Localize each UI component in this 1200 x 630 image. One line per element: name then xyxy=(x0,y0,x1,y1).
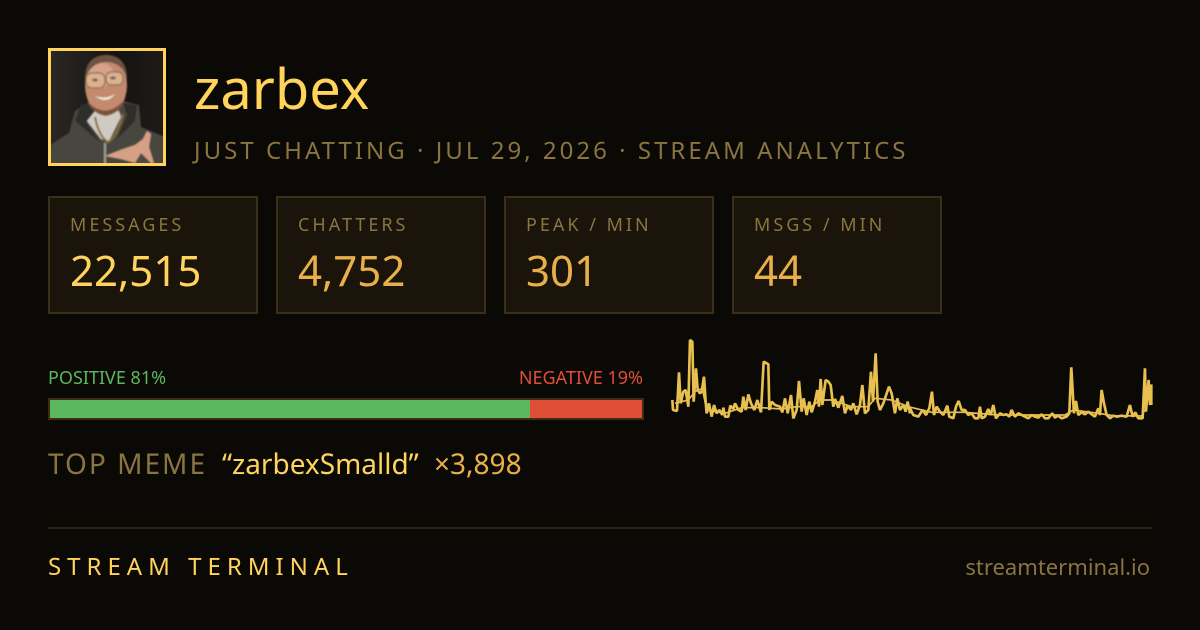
stat card: chatters: CHATTERS xyxy=(298,213,408,237)
site url: streamterminal.io xyxy=(965,552,1150,582)
top meme row: “zarbexSmalld” xyxy=(222,445,419,483)
positive label: POSITIVE 81% xyxy=(48,366,166,390)
top meme row xyxy=(48,445,522,483)
stat card: peak per minute: 301 xyxy=(526,242,598,299)
stat card: peak per minute: PEAK / MIN xyxy=(526,213,652,237)
stat card: messages per minute: MSGS / MIN xyxy=(754,213,885,237)
stat card: messages xyxy=(48,196,258,314)
footer divider xyxy=(48,527,1152,529)
top meme row: TOP MEME xyxy=(48,445,207,483)
stat card: messages per minute: 44 xyxy=(754,242,802,299)
stat card: messages: 22,515 xyxy=(70,242,201,299)
brand: STREAM TERMINAL xyxy=(48,550,354,583)
stat card: peak per minute xyxy=(504,196,714,314)
stat card: messages per minute xyxy=(732,196,942,314)
subtitle: JUST CHATTING · JUL 29, 2026 · STREAM ANALYTICS xyxy=(194,134,909,167)
sentiment bar xyxy=(48,398,644,420)
negative label: NEGATIVE 19% xyxy=(519,366,643,390)
stat card: messages: MESSAGES xyxy=(70,213,184,237)
stat card: chatters xyxy=(276,196,486,314)
top meme row: ×3,898 xyxy=(434,445,522,483)
avatar portrait xyxy=(48,48,166,166)
streamer name: zarbex xyxy=(194,50,369,126)
stat card: chatters: 4,752 xyxy=(298,242,405,299)
